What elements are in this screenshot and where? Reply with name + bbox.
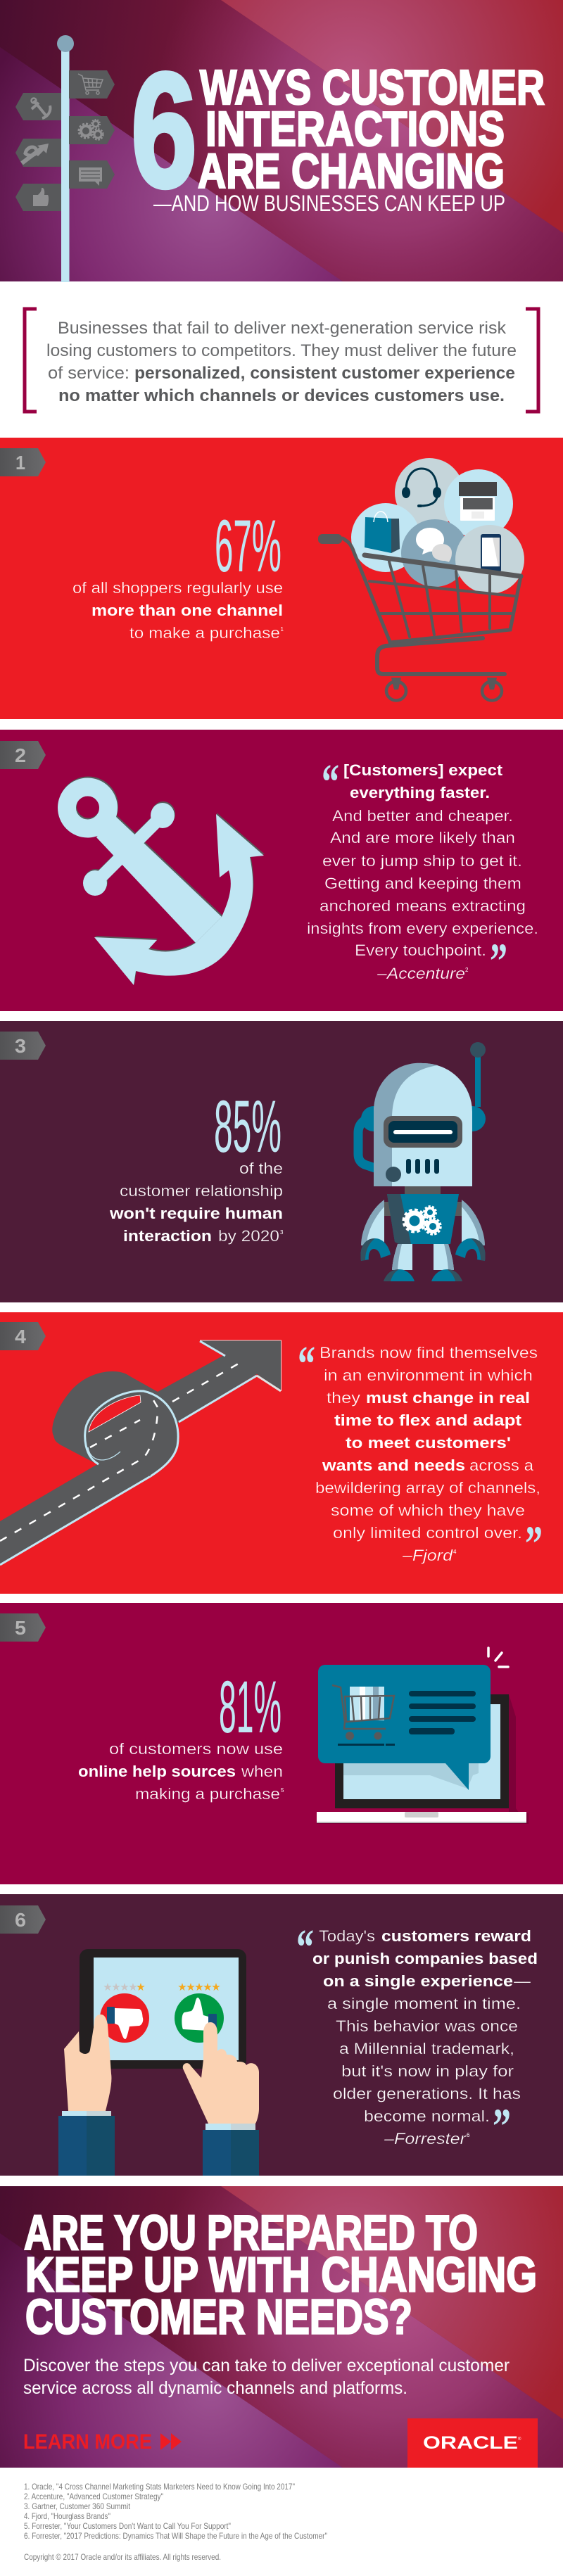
panel: section 1 shoppers: 67% xyxy=(215,505,282,588)
quote text: must change in real xyxy=(366,1389,530,1407)
intro statement: losing customers to competitors. They must deliver the future xyxy=(46,341,517,360)
chat bubbles xyxy=(416,528,444,554)
icon: robot xyxy=(358,1042,486,1281)
footnotes: 5. Forrester, "Your Customers Don't Want to Call You For Support" xyxy=(24,2521,231,2531)
CTA headline xyxy=(24,2205,537,2345)
quote text: but it's now in play for xyxy=(341,2062,514,2080)
stat description: by 2020 xyxy=(218,1227,279,1245)
stat description: won't require human xyxy=(109,1205,283,1222)
rating stars: ★ xyxy=(203,1981,213,1993)
quote text: Brands now find themselves xyxy=(320,1344,538,1362)
quote text: in an environment in which xyxy=(324,1366,533,1384)
number tag 6: 6 xyxy=(15,1909,26,1931)
number tag 6 xyxy=(0,1905,46,1934)
stat description xyxy=(78,1740,284,1803)
signpost xyxy=(15,35,115,282)
rating stars: ★ xyxy=(128,1981,138,1993)
quote text: or punish companies based xyxy=(312,1950,538,1967)
quote text: across a xyxy=(469,1457,534,1474)
stat description: of customers now use xyxy=(109,1740,283,1758)
CTA body text xyxy=(23,2356,510,2398)
panel: section 2 Accenture quote xyxy=(0,730,563,1011)
quote text: –Forrester xyxy=(384,2130,467,2147)
quote text: Every touchpoint. xyxy=(355,941,486,959)
quote text: — xyxy=(514,1972,531,1990)
gears xyxy=(404,1206,441,1234)
icon: anchor xyxy=(67,787,264,985)
stat description xyxy=(72,579,284,642)
quote text: 6 xyxy=(467,2132,470,2138)
laptop xyxy=(459,482,497,496)
quote text: ” xyxy=(493,2098,511,2155)
stat description: of the xyxy=(239,1160,283,1177)
icon: shopping cart with channels xyxy=(318,458,524,701)
quote text: And better and cheaper. xyxy=(332,807,513,825)
stat description: when xyxy=(241,1763,283,1780)
quote text: on a single experience xyxy=(323,1972,513,1990)
panel: section 5 online help xyxy=(0,1603,563,1884)
rating stars xyxy=(103,1981,221,1993)
Oracle logo: ® xyxy=(518,2437,521,2442)
intro statement: no matter which channels or devices customers use. xyxy=(58,386,505,405)
footnotes: 2. Accenture, "Advanced Customer Strategy" xyxy=(24,2492,163,2501)
left hand xyxy=(64,2015,111,2111)
number tag 1 xyxy=(0,448,46,476)
stat description: 5 xyxy=(281,1787,284,1794)
quote text: wants and needs xyxy=(322,1457,465,1474)
quote text: a single moment in time. xyxy=(327,1995,521,2012)
intro statement xyxy=(25,309,538,412)
number tag 3 xyxy=(0,1032,46,1060)
footnotes: 3. Gartner, Customer 360 Summit xyxy=(24,2501,131,2511)
icon: tablet and hands xyxy=(58,1949,259,2176)
panel: section 4 Fjord quote xyxy=(0,1312,563,1594)
quote text: 2 xyxy=(465,967,469,973)
stat description xyxy=(109,1160,284,1245)
quote text: –Fjord xyxy=(402,1547,453,1564)
quote text: Today's xyxy=(319,1927,375,1945)
quote text: to meet customers' xyxy=(346,1434,511,1452)
quote text: everything faster. xyxy=(350,784,490,801)
rating stars: ★ xyxy=(211,1981,221,1993)
quote text: they xyxy=(327,1389,360,1407)
quote text: “ xyxy=(322,754,339,810)
quote text xyxy=(307,754,538,989)
cart frame xyxy=(343,538,521,701)
rating stars: ★ xyxy=(186,1981,196,1993)
quote text: –Accenture xyxy=(377,965,465,982)
phone xyxy=(481,534,501,572)
panel: call to action xyxy=(0,2186,563,2468)
CTA body text: Discover the steps you can take to deliver exceptional customer xyxy=(23,2356,510,2375)
number tag 2 xyxy=(0,741,46,769)
stat description: interaction xyxy=(123,1227,212,1245)
shopping bag xyxy=(365,517,392,553)
quote text: “ xyxy=(296,1919,314,1975)
learn more link: LEARN MORE xyxy=(23,2430,152,2454)
rating stars: ★ xyxy=(136,1981,146,1993)
number tag 4 xyxy=(0,1322,46,1350)
Oracle logo: ORACLE xyxy=(423,2433,518,2453)
headset xyxy=(406,469,437,506)
rating stars: ★ xyxy=(120,1981,129,1993)
quote text: only limited control over. xyxy=(333,1524,522,1542)
quote text: [Customers] expect xyxy=(343,761,503,779)
quote text xyxy=(298,1335,543,1572)
title xyxy=(131,39,545,222)
quote text: older generations. It has xyxy=(333,2085,521,2102)
quote text: This behavior was once xyxy=(336,2017,518,2035)
icon: looping road arrow xyxy=(0,1340,282,1565)
panel: section 3 human interaction: 85% xyxy=(214,1086,282,1168)
number tag 2: 2 xyxy=(15,744,26,766)
stat description: online help sources xyxy=(78,1763,236,1780)
footnotes: Copyright © 2017 Oracle and/or its affiliates. All rights reserved. xyxy=(24,2552,221,2562)
stat description: more than one channel xyxy=(91,602,283,619)
Oracle logo xyxy=(407,2418,538,2468)
quote text: 4 xyxy=(453,1549,457,1555)
quote text: insights from every experience. xyxy=(307,920,538,937)
intro statement: Businesses that fail to deliver next-generation service risk xyxy=(58,319,507,338)
number tag 3: 3 xyxy=(15,1035,26,1057)
quote text: ” xyxy=(490,933,507,989)
footnotes: 1. Oracle, "4 Cross Channel Marketing Stats Marketers Need to Know Going Into 2017" xyxy=(24,2482,295,2492)
stat description: making a purchase xyxy=(135,1785,280,1803)
panel: section 6 Forrester quote xyxy=(0,1894,563,2176)
footnotes: 6. Forrester, "2017 Predictions: Dynamics That Will Shape the Future in the Age of the Customer" xyxy=(24,2531,327,2541)
CTA body text: service across all dynamic channels and platforms. xyxy=(23,2378,407,2398)
robot arm mirrored xyxy=(431,1200,486,1281)
quote text: “ xyxy=(298,1335,315,1392)
CTA headline: CUSTOMER NEEDS? xyxy=(25,2290,412,2345)
brackets xyxy=(25,309,538,412)
quote text: customers reward xyxy=(381,1927,531,1945)
rating stars: ★ xyxy=(103,1981,113,1993)
panel: section 5 online help: 81% xyxy=(219,1666,282,1749)
icon: laptop with chat bubble xyxy=(317,1648,529,1824)
panel: section 1 shoppers xyxy=(0,438,563,719)
quote text: become normal. xyxy=(364,2107,490,2125)
quote text: And are more likely than xyxy=(330,829,515,846)
number tag 5: 5 xyxy=(15,1617,26,1639)
quote text xyxy=(296,1919,538,2155)
rating stars: ★ xyxy=(111,1981,121,1993)
quote text: time to flex and adapt xyxy=(334,1411,522,1429)
number tag 4: 4 xyxy=(15,1326,26,1347)
rating stars: ★ xyxy=(177,1981,187,1993)
intro statement: of service: xyxy=(48,364,129,383)
quote text: ever to jump ship to get it. xyxy=(322,852,522,870)
quote text: anchored means extracting xyxy=(320,897,526,915)
panel: section 3 human interaction xyxy=(0,1021,563,1302)
rating stars: ★ xyxy=(194,1981,204,1993)
stat description: to make a purchase xyxy=(129,624,280,642)
robot arm xyxy=(360,1200,415,1281)
right hand xyxy=(183,2022,259,2124)
footnotes xyxy=(24,2482,327,2562)
number tag 1: 1 xyxy=(15,452,25,474)
number tag 5 xyxy=(0,1613,46,1642)
quote text: a Millennial trademark, xyxy=(339,2040,514,2057)
stat description: 1 xyxy=(280,626,284,633)
quote text: some of which they have xyxy=(331,1502,525,1519)
big 6: 6 xyxy=(131,39,197,222)
quote text: bewildering array of channels, xyxy=(315,1479,540,1497)
quote text: ” xyxy=(525,1516,543,1572)
intro statement: personalized, consistent customer experience xyxy=(134,364,515,383)
stat description: of all shoppers regularly use xyxy=(72,579,283,597)
stat description: 3 xyxy=(280,1229,284,1236)
quote text: Getting and keeping them xyxy=(324,875,521,892)
stat description: customer relationship xyxy=(120,1182,283,1200)
footnotes: 4. Fjord, "Hourglass Brands" xyxy=(24,2511,110,2521)
header banner xyxy=(0,0,563,282)
